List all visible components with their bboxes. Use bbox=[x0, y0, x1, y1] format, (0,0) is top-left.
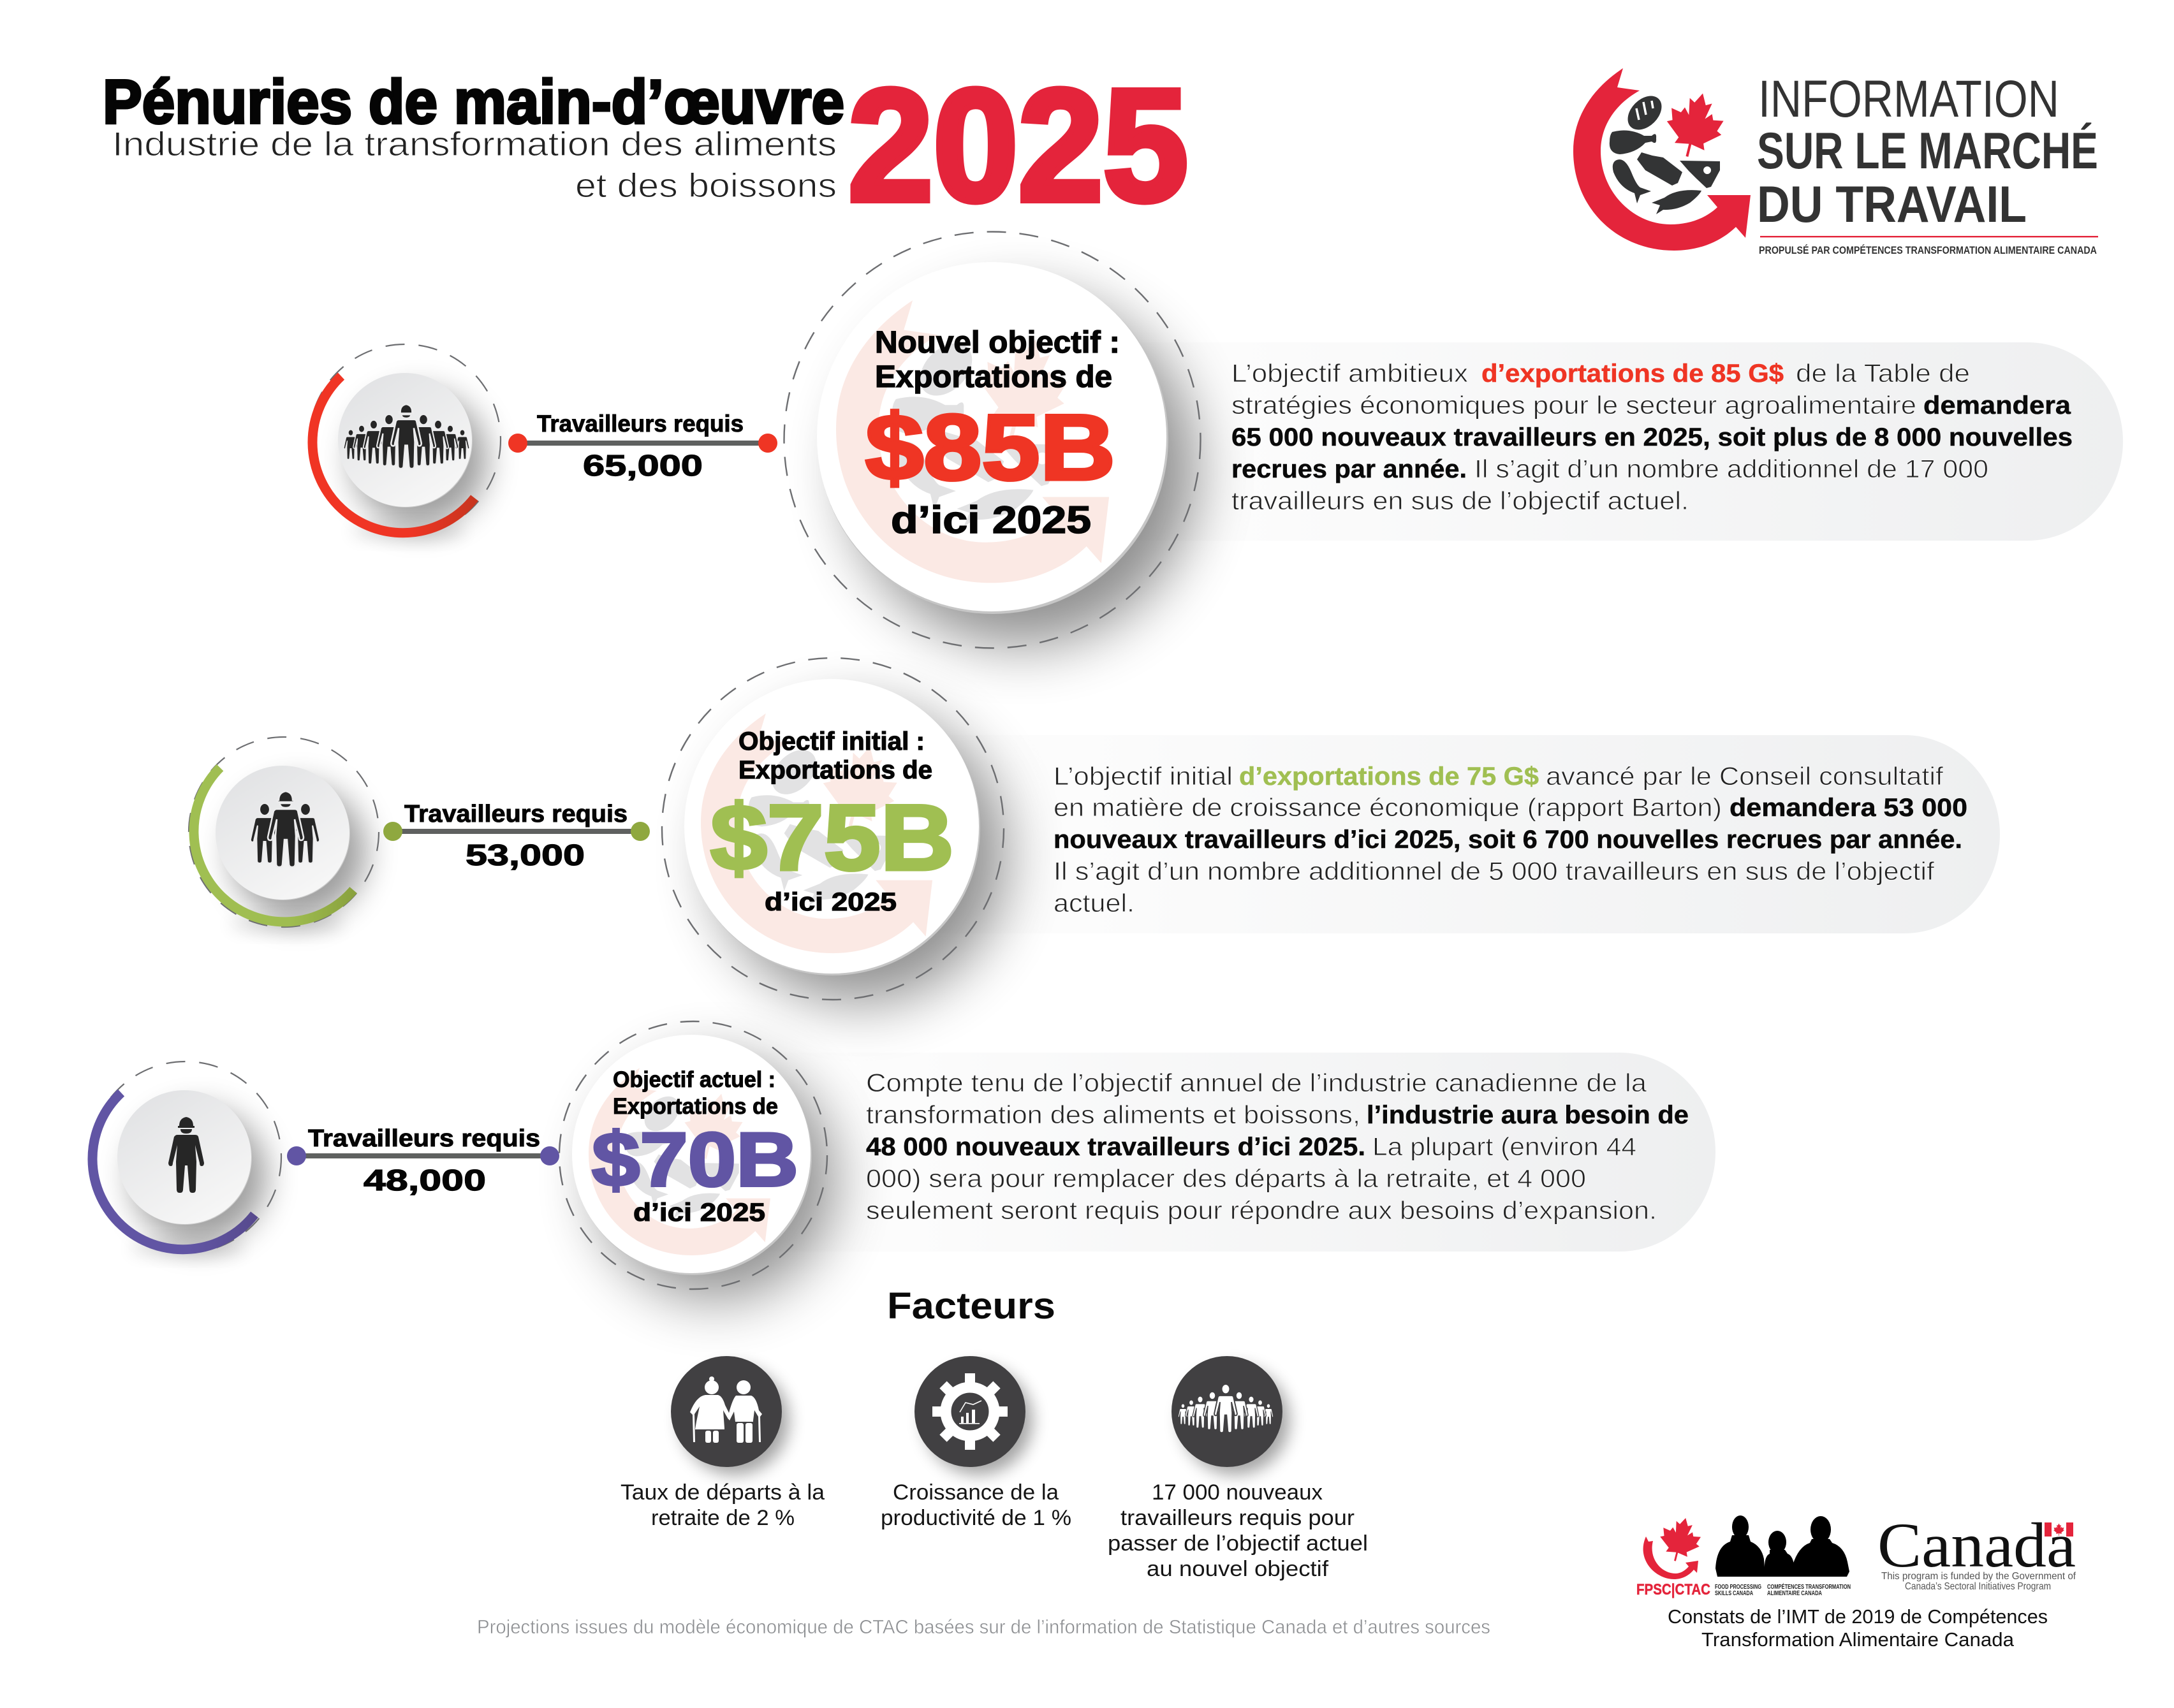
bread scoring bbox=[1636, 101, 1653, 120]
icon: canadian flag bbox=[2045, 1522, 2073, 1536]
captions: factors: productivité de 1 % bbox=[881, 1506, 1071, 1530]
credit text: Constats de l’IMT de 2019 de Compétences bbox=[1668, 1605, 2048, 1628]
row: 85B target circle: d’ici 2025 bbox=[891, 499, 1091, 541]
watermark logo bbox=[701, 713, 932, 953]
row: 65,000 workers: Travailleurs requis bbox=[537, 411, 744, 437]
footnote: Projections issues du modèle économique de CTAC basées sur de l’information de Statistique Canada et d’autres sources bbox=[477, 1616, 1490, 1638]
row: 85B target circle: Exportations de bbox=[875, 360, 1112, 394]
panel: objectif initial text: nouveaux travailleurs d’ici 2025, soit 6 700 nouvelles recrues par année. bbox=[1054, 826, 1962, 854]
captions: factors: Taux de départs à la bbox=[621, 1480, 825, 1505]
silhouettes bbox=[1715, 1515, 1849, 1577]
icon: crowd of nine workers bbox=[344, 404, 469, 469]
panel: objectif initial text: avancé par le Conseil consultatif bbox=[1546, 763, 1944, 791]
row: 48,000 workers: 48,000 bbox=[364, 1164, 486, 1197]
captions: factors: travailleurs requis pour bbox=[1120, 1506, 1355, 1530]
logo: Canada wordmark: This program is funded by the Government of bbox=[1881, 1571, 2076, 1582]
captions: factors: au nouvel objectif bbox=[1147, 1557, 1329, 1581]
row: 53,000 workers bbox=[189, 737, 650, 933]
factor: retirement bbox=[671, 1356, 789, 1475]
panel: objectif initial text: en matière de croissance économique (rapport Barton) bbox=[1054, 794, 1722, 822]
row: 70B target circle: $70B bbox=[592, 1117, 798, 1202]
logo: FPSC CTAC: SKILLS CANADA bbox=[1715, 1590, 1753, 1597]
heading: facteurs: Facteurs bbox=[887, 1285, 1055, 1327]
row: 53,000 workers: Travailleurs requis bbox=[404, 801, 628, 828]
logo: Canada wordmark: Canada bbox=[1877, 1510, 2076, 1580]
row: 85B target circle: $85B bbox=[865, 395, 1115, 499]
heading: pénuries de main-d'œuvre: Pénuries de main-d’œuvre bbox=[103, 67, 844, 136]
factor: productivity bbox=[914, 1356, 1032, 1475]
row: 70B target circle: Objectif actuel : bbox=[613, 1067, 775, 1092]
factor: new workers bbox=[1171, 1356, 1289, 1475]
panel: objectif initial text: actuel. bbox=[1054, 889, 1135, 917]
row: 65,000 workers: 65,000 bbox=[583, 449, 703, 482]
logo: information sur le marché du travail: DU TRAVAIL bbox=[1757, 176, 2027, 233]
captions: factors: Croissance de la bbox=[893, 1480, 1059, 1505]
logo: information sur le marché du travail: INFORMATION bbox=[1758, 70, 2059, 128]
panel: objectif actuel text: 000) sera pour remplacer des départs à la retraite, et 4 000 bbox=[866, 1165, 1586, 1193]
captions: factors bbox=[621, 1480, 1368, 1581]
logo: information sur le marché du travail: PROPULSÉ PAR COMPÉTENCES TRANSFORMATION ALIMENTAIRE CANADA bbox=[1759, 244, 2097, 256]
panel: objectif initial text: Il s’agit d’un nombre additionnel de 5 000 travailleurs en sus de l’objectif bbox=[1054, 858, 1935, 886]
connector line bbox=[383, 822, 650, 841]
panel: nouvel objectif text bbox=[992, 342, 2123, 541]
connector line bbox=[287, 1146, 559, 1165]
icon: seniors bbox=[690, 1376, 762, 1443]
icon: single worker bbox=[168, 1117, 204, 1193]
row: 48,000 workers bbox=[90, 1062, 559, 1257]
icon: white crowd bbox=[1178, 1384, 1274, 1433]
icon: gear with chart bbox=[932, 1373, 1008, 1450]
logo: FPSC CTAC: FOOD PROCESSING bbox=[1715, 1584, 1761, 1591]
panel: nouvel objectif text: travailleurs en sus de l’objectif actuel. bbox=[1231, 487, 1689, 515]
row: 65,000 workers bbox=[309, 344, 777, 541]
panel: objectif initial text: d’exportations de 75 G$ bbox=[1239, 763, 1539, 791]
credit text bbox=[1668, 1605, 2048, 1651]
title: et des boissons bbox=[575, 167, 837, 205]
row: 85B target circle: Nouvel objectif : bbox=[875, 326, 1120, 360]
logo arrow bbox=[1573, 68, 1751, 251]
row: 70B target circle: d’ici 2025 bbox=[633, 1199, 765, 1227]
logo: FPSC CTAC bbox=[1636, 1513, 1851, 1598]
panel: nouvel objectif text: recrues par année. bbox=[1231, 455, 1467, 483]
row: 75B target circle: $75B bbox=[710, 785, 954, 889]
panel: objectif actuel text: La plupart (environ 44 bbox=[1372, 1133, 1636, 1161]
logo: FPSC CTAC: ALIMENTAIRE CANADA bbox=[1767, 1590, 1822, 1597]
panel: nouvel objectif text: d’exportations de 85 G$ bbox=[1481, 360, 1784, 388]
panel: objectif initial text bbox=[832, 735, 2000, 933]
panel: objectif actuel text: 48 000 nouveaux travailleurs d’ici 2025. bbox=[866, 1133, 1365, 1161]
logo: information sur le marché du travail bbox=[1573, 68, 2098, 256]
logo: FPSC CTAC: FPSC|CTAC bbox=[1636, 1581, 1710, 1598]
connector line bbox=[508, 434, 777, 453]
title: 2025 bbox=[848, 56, 1188, 234]
icon: three workers bbox=[251, 791, 319, 867]
panel: objectif initial text: L’objectif initial bbox=[1054, 763, 1233, 791]
panel: nouvel objectif text: stratégies économiques pour le secteur agroalimentaire bbox=[1231, 391, 1916, 420]
panel: objectif actuel text: l’industrie aura besoin de bbox=[1367, 1101, 1689, 1129]
row: 48,000 workers: Travailleurs requis bbox=[308, 1125, 540, 1152]
captions: factors: passer de l’objectif actuel bbox=[1108, 1531, 1368, 1556]
panel: objectif actuel text: Compte tenu de l’objectif annuel de l’industrie canadienne de la bbox=[866, 1069, 1647, 1097]
row: 70B target circle: Exportations de bbox=[613, 1094, 778, 1119]
row: 75B target circle: d’ici 2025 bbox=[765, 888, 897, 916]
watermark logo bbox=[836, 300, 1109, 583]
row: 85B target circle bbox=[784, 232, 1200, 648]
panel: objectif actuel text: transformation des aliments et boissons, bbox=[866, 1101, 1360, 1129]
watermark logo bbox=[589, 1068, 770, 1255]
row: 75B target circle: Exportations de bbox=[738, 756, 932, 784]
row: 70B target circle bbox=[559, 1021, 834, 1299]
captions: factors: retraite de 2 % bbox=[651, 1506, 795, 1530]
captions: factors: 17 000 nouveaux bbox=[1152, 1480, 1323, 1505]
panel: nouvel objectif text: de la Table de bbox=[1796, 360, 1970, 388]
panel: objectif initial text: demandera 53 000 bbox=[1730, 794, 1967, 822]
panel: nouvel objectif text: L’objectif ambitieux bbox=[1231, 360, 1468, 388]
title bbox=[103, 56, 1188, 234]
panel: objectif actuel text: seulement seront requis pour répondre aux besoins d’expansion. bbox=[866, 1197, 1657, 1225]
panel: nouvel objectif text: demandera bbox=[1923, 391, 2071, 420]
row: 75B target circle bbox=[662, 658, 1005, 1002]
logo: Canada wordmark: Canada’s Sectoral Initiatives Program bbox=[1905, 1581, 2051, 1592]
credit text: Transformation Alimentaire Canada bbox=[1701, 1628, 2015, 1651]
panel: objectif actuel text bbox=[691, 1053, 1715, 1252]
row: 53,000 workers: 53,000 bbox=[466, 838, 585, 872]
logo: FPSC CTAC: COMPÉTENCES TRANSFORMATION bbox=[1767, 1582, 1851, 1591]
panel: nouvel objectif text: Il s’agit d’un nombre additionnel de 17 000 bbox=[1474, 455, 1988, 483]
title: Industrie de la transformation des aliments bbox=[112, 126, 837, 163]
panel: nouvel objectif text: 65 000 nouveaux travailleurs en 2025, soit plus de 8 000 nouvelles bbox=[1231, 423, 2073, 451]
row: 75B target circle: Objectif initial : bbox=[738, 727, 925, 755]
